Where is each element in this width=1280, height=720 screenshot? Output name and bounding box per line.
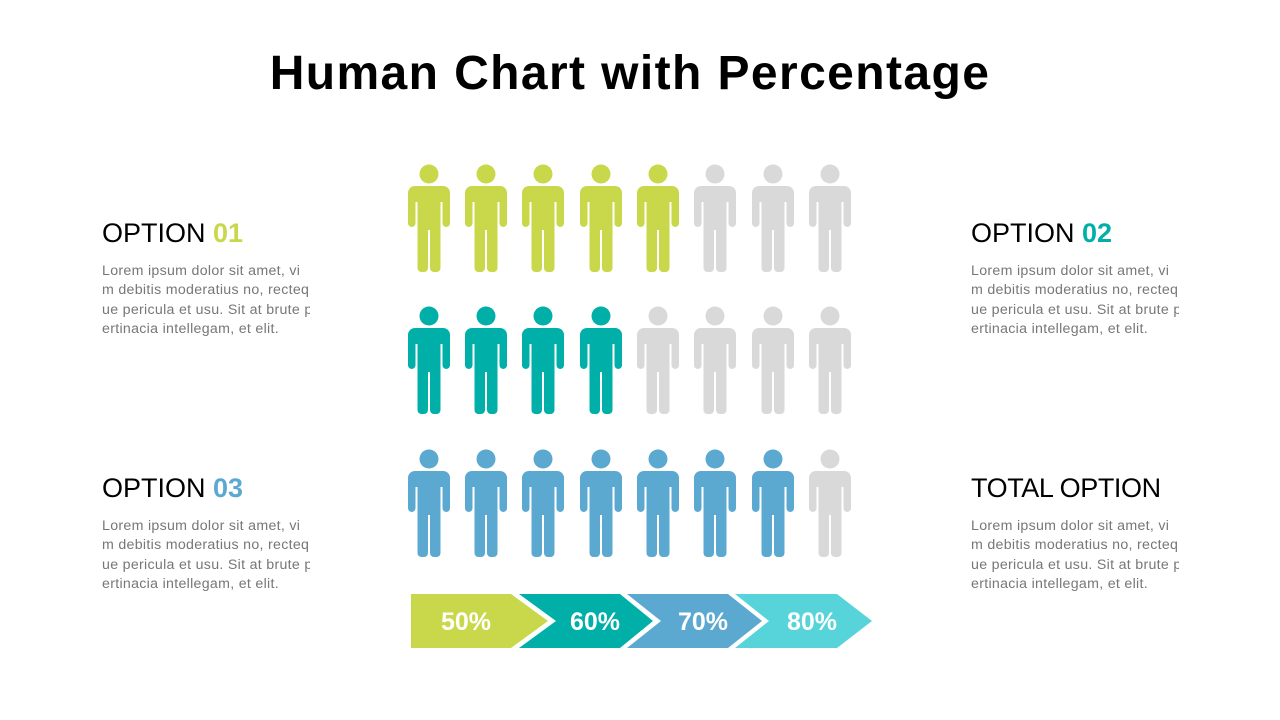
total option text (971, 473, 1179, 592)
option 02 text: m debitis moderatius no, recteq (971, 282, 1178, 298)
option 03 text: m debitis moderatius no, recteq (102, 537, 309, 553)
option 03 text: OPTION 03 (102, 473, 243, 503)
row 2: option 02 (4 of 8) (408, 306, 851, 414)
arrow 50%: 50% (441, 608, 491, 636)
option 01 text: ertinacia intellegam, et elit. (102, 321, 279, 337)
arrow 50% (411, 594, 548, 648)
total option text: TOTAL OPTION (971, 473, 1161, 503)
option 02 text: OPTION 02 (971, 218, 1112, 248)
total option text: Lorem ipsum dolor sit amet, vi (971, 518, 1169, 534)
option 03 text: ue pericula et usu. Sit at brute p (102, 557, 310, 573)
option 01 text: ue pericula et usu. Sit at brute p (102, 302, 310, 318)
option 02 text: Lorem ipsum dolor sit amet, vi (971, 263, 1169, 279)
option 01 text: OPTION 01 (102, 218, 243, 248)
arrow 70% (627, 594, 762, 648)
option 01 text: Lorem ipsum dolor sit amet, vi (102, 263, 300, 279)
arrow 80%: 80% (787, 608, 837, 636)
arrow 60% (519, 594, 653, 648)
title: Human Chart with Percentage (270, 47, 990, 100)
row 1: option 01 (5 of 8) (408, 164, 851, 272)
option 01 text: m debitis moderatius no, recteq (102, 282, 309, 298)
row 3: option 03 (7 of 8) (408, 450, 851, 557)
option 02 text: ertinacia intellegam, et elit. (971, 321, 1148, 337)
arrow 80% (735, 594, 872, 648)
option 03 text: ertinacia intellegam, et elit. (102, 576, 279, 592)
total option text: ue pericula et usu. Sit at brute p (971, 557, 1179, 573)
total option text: ertinacia intellegam, et elit. (971, 576, 1148, 592)
total option text: m debitis moderatius no, recteq (971, 537, 1178, 553)
option 03 text: Lorem ipsum dolor sit amet, vi (102, 518, 300, 534)
arrow 60%: 60% (570, 608, 620, 636)
option 02 text: ue pericula et usu. Sit at brute p (971, 302, 1179, 318)
arrow 70%: 70% (678, 608, 728, 636)
option 01 text (102, 218, 310, 337)
option 02 text (971, 218, 1179, 337)
option 03 text (102, 473, 310, 592)
percentage arrows (411, 594, 872, 648)
